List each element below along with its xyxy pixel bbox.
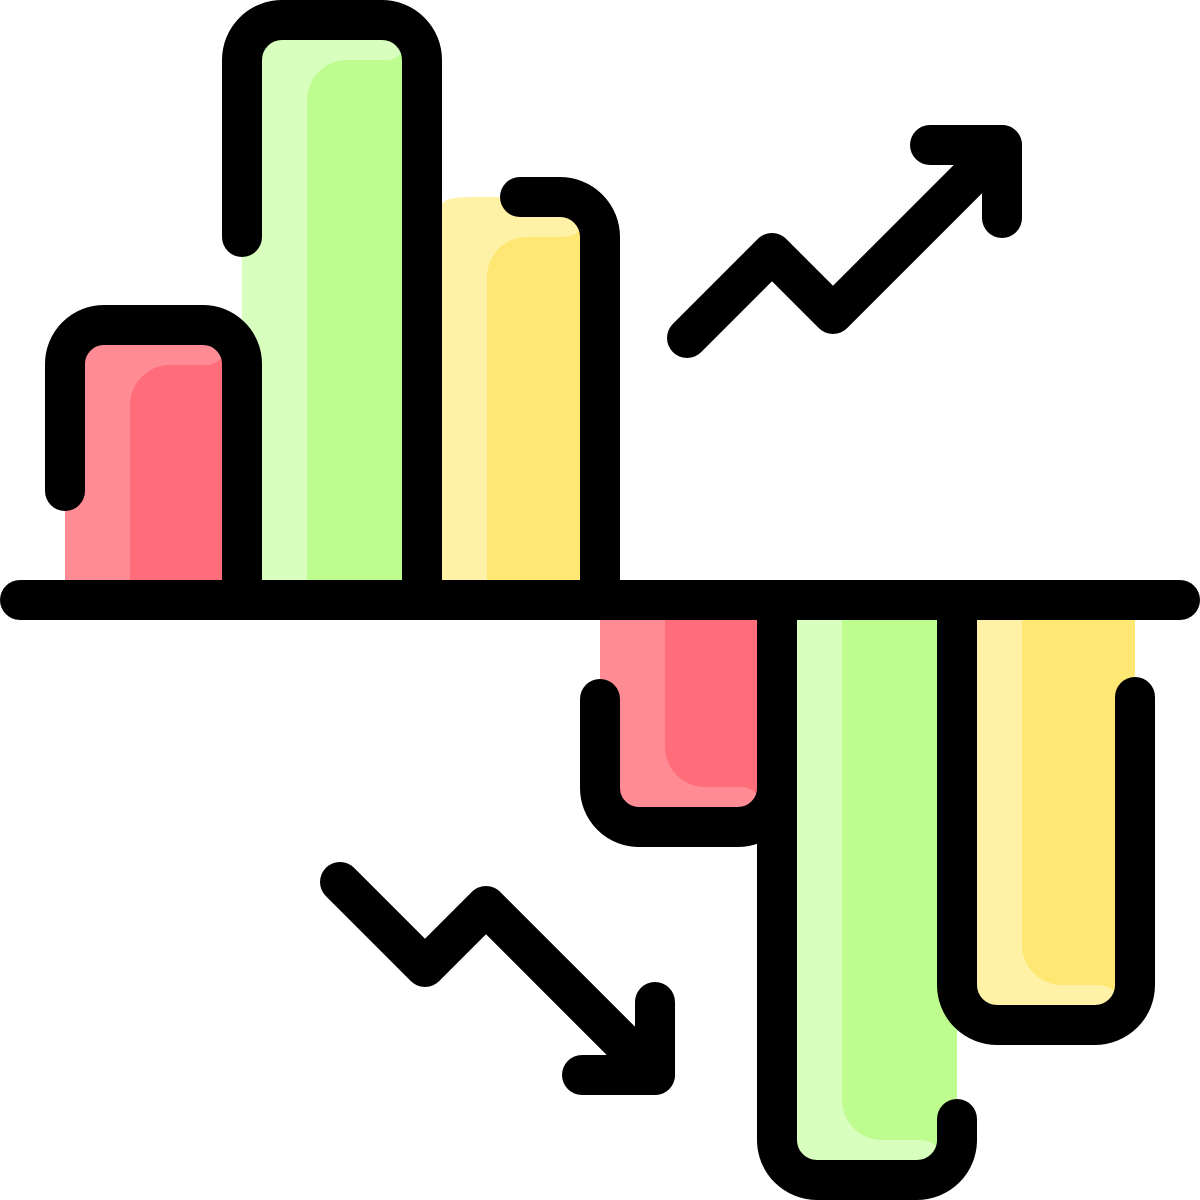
bar: upper red (65, 325, 242, 600)
bar: lower yellow (957, 600, 1135, 1025)
arrow: trending down (340, 882, 655, 1075)
arrow: trending up (687, 145, 1002, 338)
bar: lower red (600, 600, 777, 827)
bar: lower green (777, 600, 957, 1180)
bar: upper yellow (442, 197, 600, 600)
bar: upper green (242, 20, 422, 600)
axis line (20, 580, 1180, 620)
